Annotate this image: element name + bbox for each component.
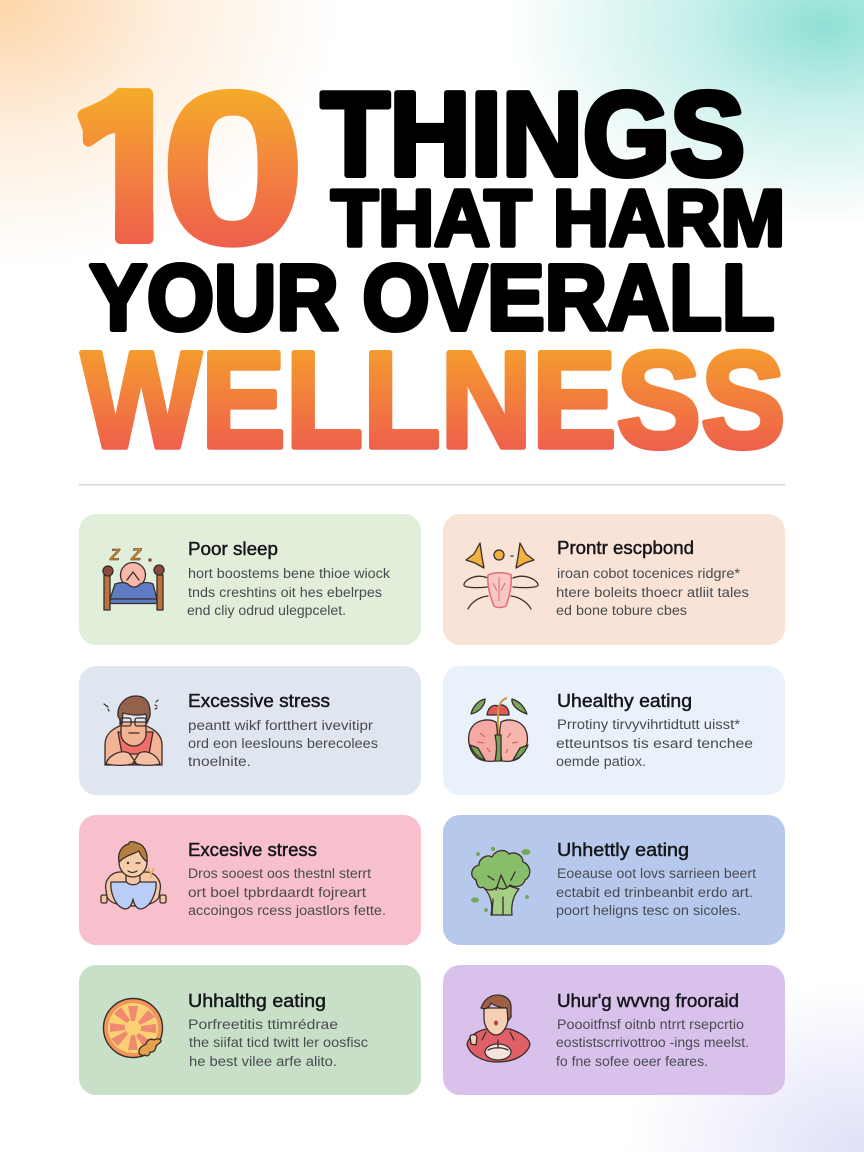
card body text: he best vilee arfe alito.	[189, 1054, 337, 1069]
card body text: htere boleits thoecr atliit tales	[556, 585, 749, 600]
card body text	[188, 718, 378, 769]
card body text: tnds creshtins oit hes ebelrpes	[188, 585, 382, 600]
card body text: Porfreetitis ttimrédrae	[188, 1017, 338, 1032]
card heading: Uhealthy eating	[557, 691, 692, 711]
title digit 0: 0	[159, 45, 307, 291]
title line: WELLNESS: WELLNESS	[82, 324, 786, 477]
panel: uhhalthg eating	[79, 965, 421, 1095]
card heading: Poor sleep	[188, 539, 278, 559]
card body text	[188, 1017, 368, 1069]
card heading: Uhhalthg eating	[188, 991, 326, 1011]
panel: uhur'g wvvng frooraid	[443, 965, 785, 1095]
card body text: etteuntsos tis esard tenchee	[556, 736, 753, 751]
card body text	[556, 566, 749, 618]
icon: person eating from bowl	[467, 995, 530, 1062]
card heading: Uhhettly eating	[557, 840, 689, 860]
card heading: Uhur'g wvvng frooraid	[557, 991, 739, 1011]
card body text: oemde patiox.	[556, 754, 646, 769]
icon: bed with sleeper	[103, 545, 164, 610]
card body text: Dros sooest oos thestnl sterrt	[188, 866, 371, 881]
card body text: Prrotiny tirvyvihrtidtutt uisst*	[557, 717, 741, 732]
title	[78, 88, 784, 452]
card body text: ord eon leeslouns berecolees	[188, 736, 378, 751]
panel: prontr escpbond	[443, 514, 785, 645]
card body text: peantt wikf fortthert ivevitipr	[188, 718, 374, 733]
card body text: Poooitfnsf oitnb ntrrt rsepcrtio	[557, 1017, 744, 1032]
icon: organ with stars	[464, 543, 538, 609]
title line: YOUR OVERALL: YOUR OVERALL	[90, 246, 774, 350]
panel: uhhettly eating	[443, 815, 785, 945]
icon: citrus slice	[104, 998, 162, 1058]
icon: stressed man	[104, 696, 162, 765]
title line: THINGS: THINGS	[321, 68, 745, 201]
card body text: iroan cobot tocenices ridgre*	[557, 566, 741, 581]
card body text	[188, 866, 386, 918]
card body text: the siifat ticd twitt ler oosfisc	[189, 1035, 368, 1050]
card heading: Excessive stress	[188, 691, 330, 711]
title digit 1: 1	[75, 48, 184, 285]
icon: woman with blue collar	[101, 842, 166, 909]
card body text: Eoeause oot lovs sarrieen beert	[557, 866, 756, 881]
panel: excessive stress	[79, 666, 421, 795]
title line: THAT HARM: THAT HARM	[331, 174, 785, 262]
card body text: poort heligns tesc on sicoles.	[556, 903, 741, 918]
card body text: eostistscrrivottroo -ings meelst.	[556, 1035, 749, 1050]
title digit 1 flag	[78, 88, 125, 140]
card body text	[556, 1017, 749, 1069]
infographic canvas	[78, 88, 785, 1095]
icon: brain with leaves	[469, 698, 528, 761]
card body text: hort boostems bene thioe wiock	[188, 566, 390, 581]
card body text: ort boel tpbrdaardt fojreart	[188, 885, 366, 900]
card body text: fo fne sofee oeer feares.	[556, 1054, 708, 1069]
card body text	[556, 717, 753, 769]
icon: bed with sleeper: Z	[109, 547, 121, 564]
card body text: tnoelnite.	[188, 754, 251, 769]
card body text: ectabit ed trinbeanbit erdo art.	[556, 885, 753, 900]
card body text: ed bone tobure cbes	[556, 603, 687, 618]
panel: poor sleep	[79, 514, 421, 645]
panel: uhealthy eating	[443, 666, 785, 795]
icon: bed with sleeper: Z	[130, 545, 142, 564]
panel: excesive stress	[79, 815, 421, 945]
card body text: end cliy odrud ulegpcelet.	[187, 603, 346, 618]
card body text	[556, 866, 756, 918]
card body text: accoingos rcess joastlors fette.	[188, 903, 386, 918]
card body text	[187, 566, 390, 618]
card heading: Prontr escpbond	[557, 538, 694, 558]
card heading: Excesive stress	[188, 840, 317, 860]
icon: broccoli	[471, 847, 530, 915]
